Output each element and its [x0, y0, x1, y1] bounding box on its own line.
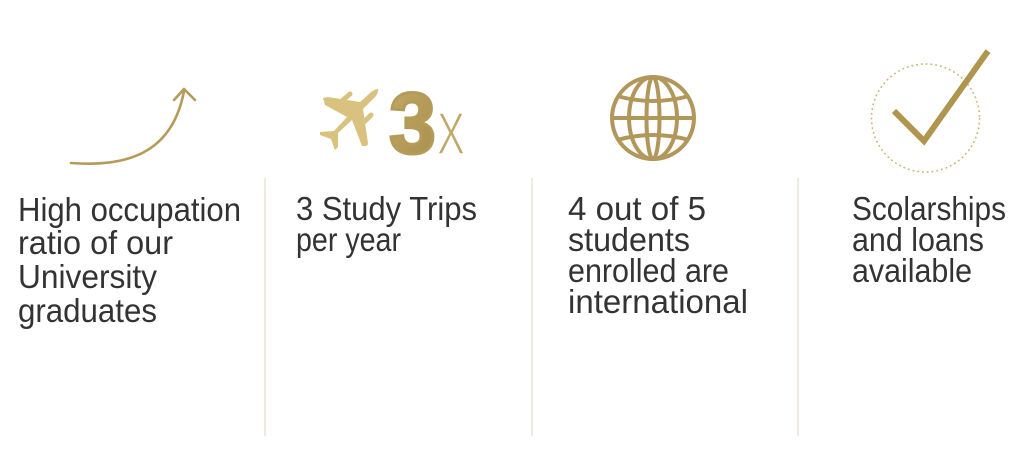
text: study trips: 3 Study Trips [296, 190, 477, 227]
panel: occupation [18, 89, 241, 329]
text: occupation: ratio of our [18, 224, 173, 261]
icon: airplane [320, 89, 378, 150]
text: international: students [568, 221, 690, 258]
text: international: 4 out of 5 [568, 190, 706, 227]
text: international: international [568, 283, 748, 320]
text: occupation [18, 191, 241, 329]
text: study trips [296, 190, 477, 258]
text: international: enrolled are [568, 252, 729, 289]
big number 3x: 3 [389, 76, 436, 172]
icon: globe [612, 77, 694, 159]
text: scholarships [852, 190, 1006, 289]
icon: check mark in dotted circle [872, 51, 988, 172]
text: scholarships: and loans [852, 221, 984, 258]
big number 3x: X [437, 101, 465, 167]
text: study trips: per year [296, 221, 401, 258]
panel: study trips [296, 76, 477, 258]
text: occupation: graduates [18, 292, 157, 329]
text: scholarships: available [852, 252, 972, 289]
panel: scholarships [852, 51, 1006, 289]
text: international [568, 190, 748, 320]
text: occupation: University [18, 258, 157, 295]
text: scholarships: Scolarships [852, 190, 1006, 227]
text: occupation: High occupation [18, 191, 241, 228]
big number 3x [389, 76, 465, 172]
panel: international [568, 77, 748, 320]
icon: rising arrow [71, 89, 195, 164]
